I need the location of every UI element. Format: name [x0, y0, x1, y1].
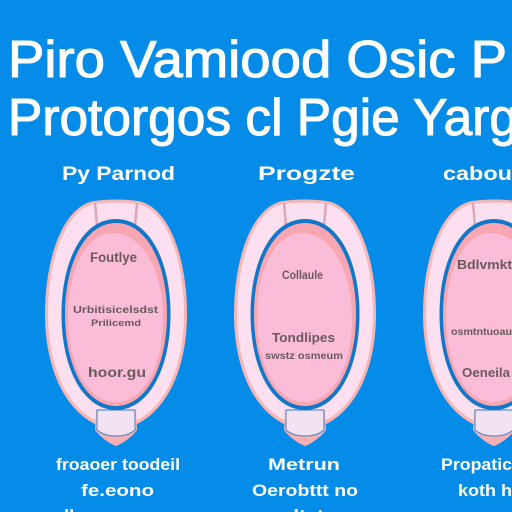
oval 1 middle sublabel: Prilicemd: [91, 318, 141, 328]
text block: column 2 caption: [252, 455, 358, 512]
text block: column 3 caption: Propatic: [441, 455, 512, 474]
oval 1 top label: Foutlye: [90, 249, 137, 265]
text block: column 3 caption: [441, 455, 512, 512]
panel: oval 3: [423, 200, 512, 446]
text block: column 1 caption: [56, 455, 180, 512]
oval 3 middle label: osmtntuoau: [451, 327, 512, 338]
oval 2 middle sublabel: swstz osmeum: [265, 351, 343, 362]
oval 1 middle label: Urbitisicelsdst: [73, 305, 159, 316]
text block: column 1 caption: froaoer toodeil: [56, 455, 180, 474]
text block: column 1 caption: fe.eono: [81, 481, 154, 500]
text block: column 2 caption: Oerobttt no: [252, 481, 358, 500]
heading: column 2: Progzte: [258, 164, 355, 185]
panel: oval 2: [234, 200, 376, 446]
heading: column 1: Py Parnod: [62, 164, 175, 185]
heading: column 3: cabou: [443, 164, 512, 185]
oval 3 top label: Bdlvmkt: [457, 257, 512, 272]
oval 2 middle label: Tondlipes: [272, 330, 335, 345]
text block: column 2 caption: Metrun: [268, 455, 340, 474]
title: [8, 31, 512, 147]
title: Protorgos cl Pgie Yarg: [8, 89, 512, 147]
oval 1 bottom label: hoor.gu: [88, 364, 146, 380]
oval 2 top label: Collaule: [282, 268, 323, 282]
title: Piro Vamiood Osic P: [8, 31, 507, 89]
oval 3 bottom label: Oeneila: [462, 365, 511, 380]
panel: oval 1: [45, 200, 187, 446]
text block: column 3 caption: koth h: [458, 481, 512, 500]
